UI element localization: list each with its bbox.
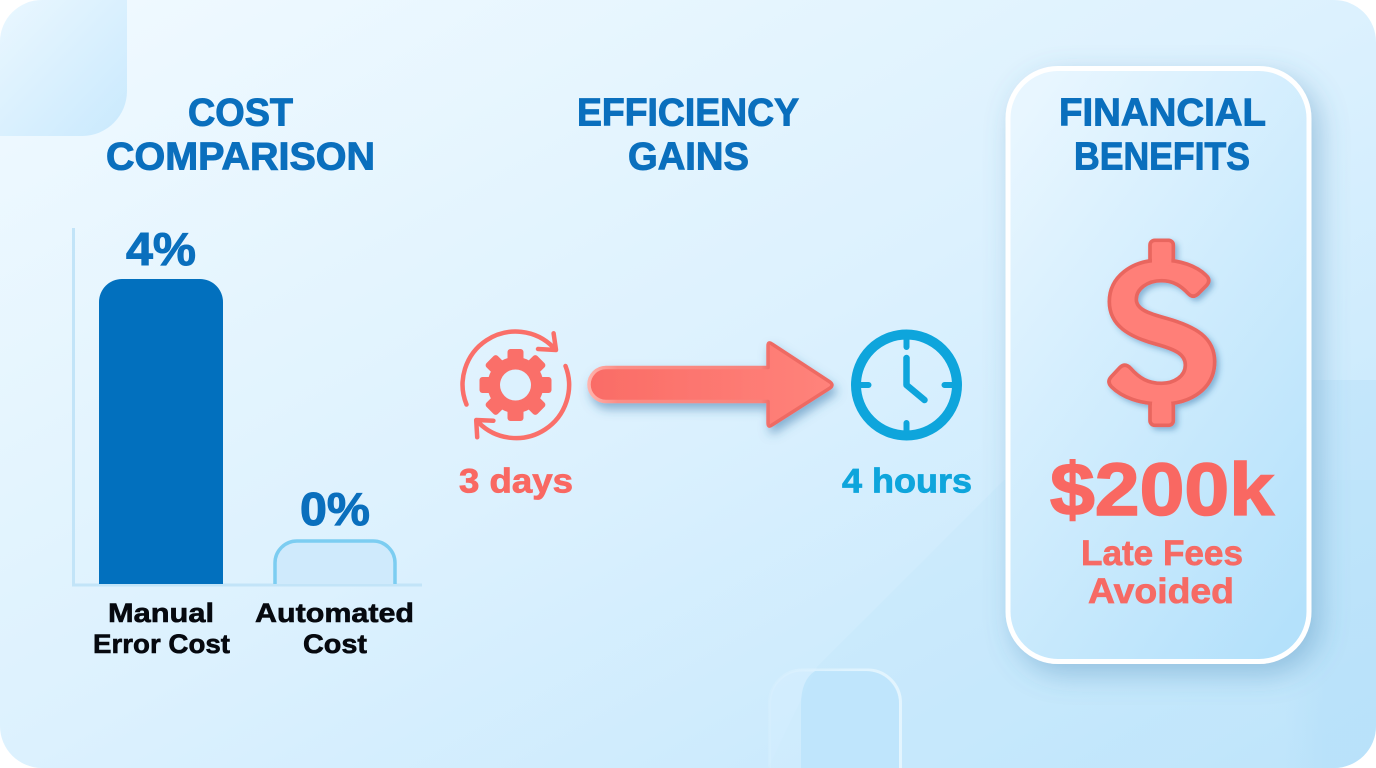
heading: financial benefits: FINANCIAL [1059,92,1266,134]
heading: cost comparison [106,92,375,178]
label: late fees avoided [1081,534,1243,611]
panel: efficiency gains [459,92,972,500]
heading: financial benefits: BENEFITS [1074,136,1250,178]
heading: efficiency gains: EFFICIENCY [577,92,799,134]
heading: efficiency gains: GAINS [628,136,749,178]
chart axes [74,228,422,585]
icon: clock [856,334,957,436]
panel: financial benefits [1008,68,1309,662]
label: automated cost: Cost [303,629,367,659]
value: $200k: $200k [1050,448,1275,531]
card background [1008,68,1309,662]
label: 4 hours: 4 hours [842,462,972,500]
bar: automated cost [275,541,395,584]
label: late fees avoided: Avoided [1088,572,1234,611]
heading: financial benefits [1059,92,1266,178]
label: manual error cost: Error Cost [93,629,230,659]
icon: dollar sign [1109,240,1215,425]
icon: gear with cycle arrows [463,332,569,438]
label: automated cost [255,598,414,659]
panel: cost comparison [74,92,422,659]
value: 0%: 0% [300,483,370,535]
label: manual error cost [93,598,230,659]
label: late fees avoided: Late Fees [1081,534,1243,573]
label: automated cost: Automated [255,598,414,628]
label: 3 days: 3 days [459,462,573,500]
heading: cost comparison: COMPARISON [106,136,375,178]
label: manual error cost: Manual [108,598,214,628]
value: 4%: 4% [126,223,196,275]
heading: cost comparison: COST [188,92,293,134]
heading: efficiency gains [577,92,799,178]
arrow: 3 days to 4 hours [589,343,832,426]
bar: manual error cost [99,279,223,584]
